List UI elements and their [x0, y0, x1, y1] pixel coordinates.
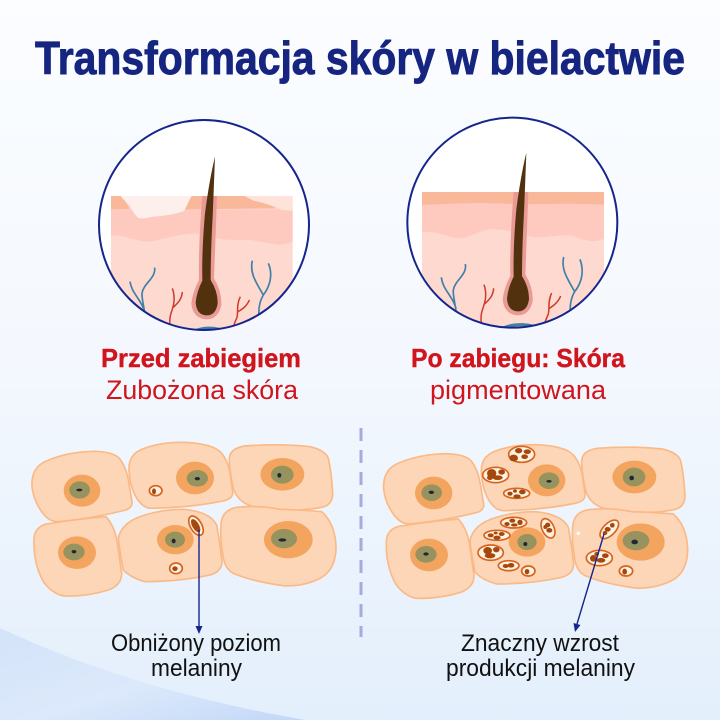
hair follicle — [191, 157, 221, 319]
heading: after — [411, 343, 626, 405]
hair follicle — [503, 153, 533, 315]
melanosomes — [483, 446, 535, 498]
heading: after: Po zabiegu: Skóra — [411, 343, 626, 373]
illustration: skin after treatment — [406, 116, 618, 329]
heading: before: Zubożona skóra — [106, 375, 299, 405]
divider — [360, 428, 362, 637]
heading: before: Przed zabiegiem — [101, 343, 301, 373]
label: low melanin: melaniny — [151, 655, 242, 682]
heading: after: pigmentowana — [430, 375, 607, 405]
cells: after, high melanin — [384, 445, 688, 598]
cells: before, low melanin — [32, 442, 336, 596]
illustration: skin before treatment — [98, 119, 310, 331]
label: low melanin: Obniżony poziom — [111, 630, 281, 657]
melanosomes — [586, 517, 633, 576]
arrow: low melanin — [196, 530, 202, 634]
heading: before — [101, 343, 301, 405]
label: high melanin: produkcji melaniny — [446, 655, 635, 682]
arrow: high melanin — [574, 534, 604, 632]
melanosomes — [478, 516, 558, 576]
label: high melanin: Znaczny wzrost — [461, 630, 619, 657]
label: high melanin — [446, 630, 635, 682]
label: low melanin — [111, 630, 281, 682]
